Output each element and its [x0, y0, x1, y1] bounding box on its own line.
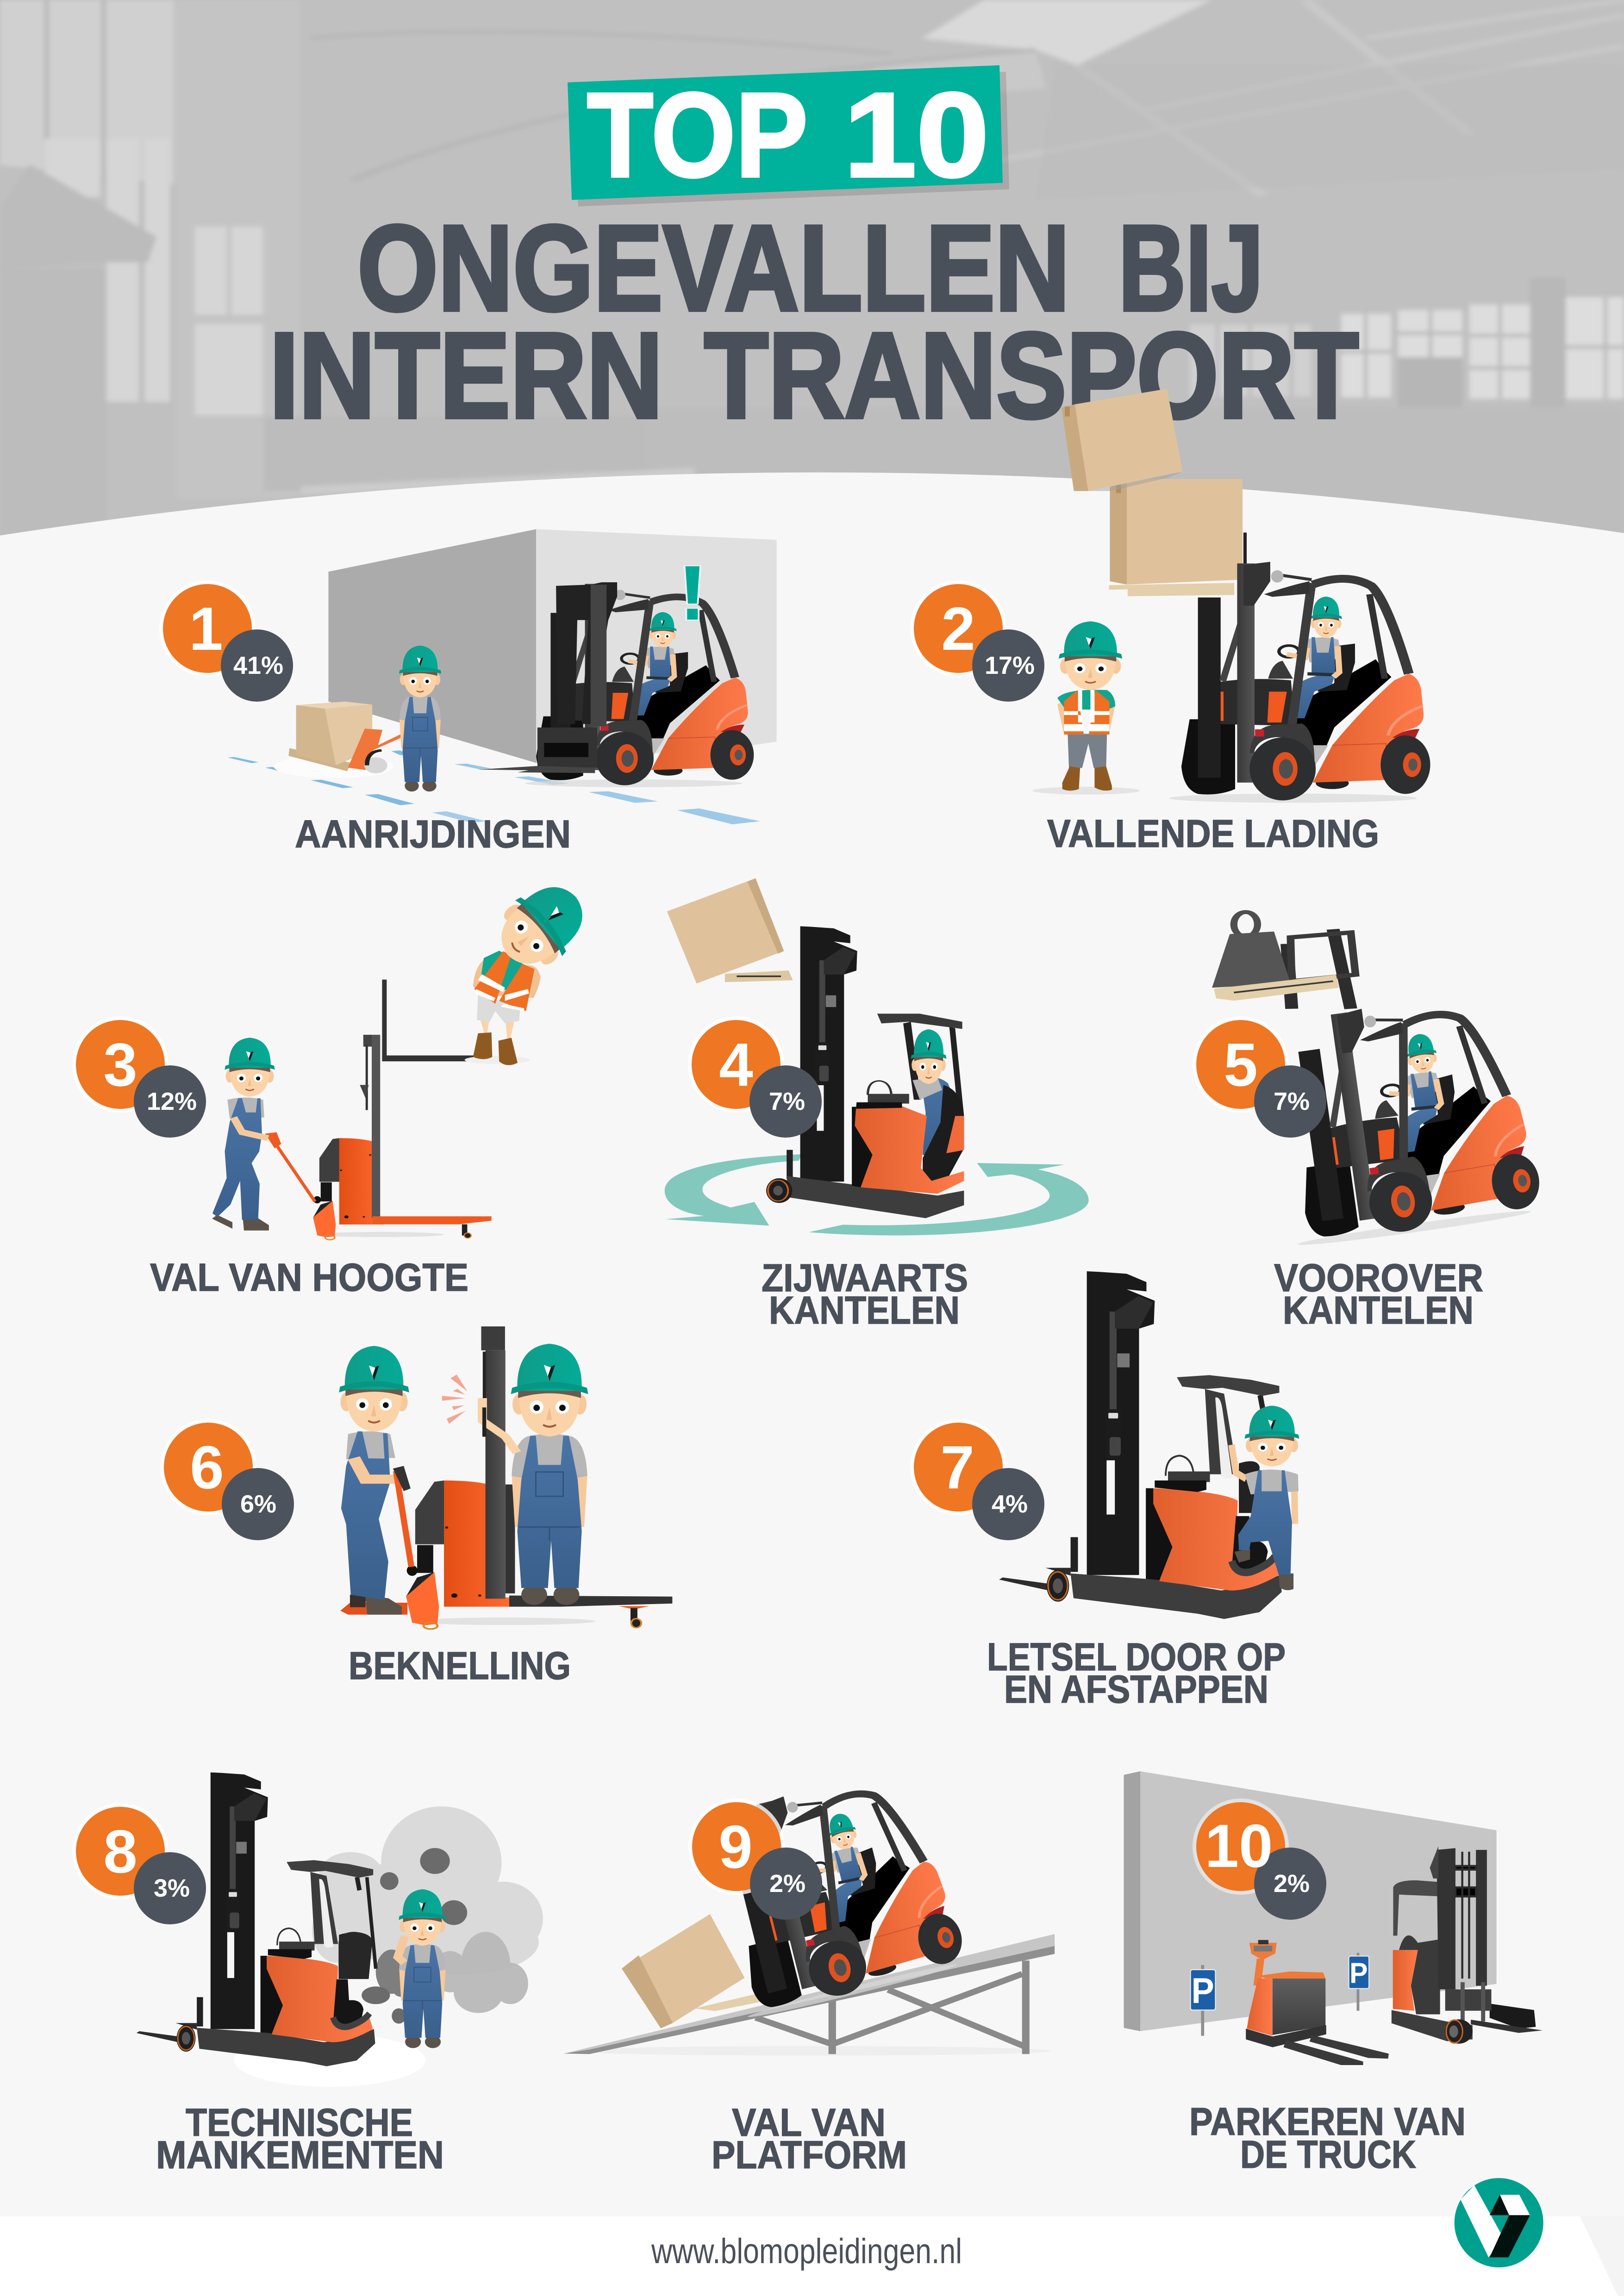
rotation arrows: [665, 1154, 1089, 1235]
worker walking: [212, 1097, 269, 1231]
forklift: [478, 582, 754, 787]
reach truck rear view: [1392, 1846, 1543, 2044]
badge 8: 3%: [154, 1874, 190, 1902]
badge 3: [72, 1016, 206, 1138]
badge 10: [1193, 1798, 1326, 1920]
tilted box and pallet: [667, 878, 793, 983]
worker left: [341, 1431, 412, 1615]
badge 4: [688, 1016, 822, 1138]
badge 5: [1193, 1016, 1326, 1138]
exclamation mark: [685, 566, 700, 620]
label: TECHNISCHE: [186, 2101, 413, 2144]
wall block: [328, 529, 777, 763]
logo: [1455, 2178, 1543, 2267]
smoke cloud: [234, 1806, 543, 2087]
worker stepping: [1231, 1445, 1299, 1590]
box and pallet: [622, 1914, 800, 2028]
badge 1: [159, 580, 293, 702]
reach truck: [999, 1271, 1282, 1619]
badge 9: 9: [718, 1813, 753, 1881]
label: KANTELEN: [1283, 1288, 1474, 1332]
panel 3: val van hoogte: [72, 869, 600, 1299]
floor dashed lines: [227, 750, 760, 824]
badge 8: [72, 1803, 206, 1924]
badge 10: 2%: [1274, 1870, 1310, 1898]
badge 7: 7: [940, 1433, 974, 1501]
ramp: [564, 1934, 1055, 2056]
label: VOOROVER: [1274, 1256, 1483, 1300]
parking signs: P: [1349, 1957, 1368, 1989]
badge 1: 41%: [233, 652, 283, 679]
stacker truck: [340, 1326, 672, 1629]
title: ONGEVALLEN: [357, 200, 1070, 336]
panel 9: val van platform: [564, 1763, 1055, 2177]
forklift: [1267, 988, 1544, 1249]
badge 6: [160, 1419, 294, 1540]
panel 5: voorover kantelen: [1193, 912, 1544, 1332]
label: VALLENDE LADING: [1047, 812, 1379, 855]
forklift on ramp: [698, 1763, 969, 2021]
label: AANRIJDINGEN: [295, 812, 571, 856]
panel 10: parkeren van de truck: [1124, 1771, 1543, 2176]
title: [269, 200, 1359, 443]
panel 7: letsel door op en afstappen: [910, 1271, 1299, 1711]
title band: top 10: TOP: [587, 68, 808, 202]
parking signs: P: [1192, 1971, 1214, 2011]
label: MANKEMENTEN: [156, 2133, 444, 2177]
badge 6: 6%: [240, 1490, 276, 1518]
badge 6: 6: [190, 1433, 224, 1501]
title band: top 10: [568, 65, 1009, 206]
label: PARKEREN VAN: [1189, 2100, 1466, 2143]
white curved main panel: [0, 473, 1624, 2296]
label: ZIJWAARTS: [762, 1256, 968, 1300]
wall: [1124, 1771, 1497, 2031]
box on pallet jack: [274, 702, 405, 778]
panel 8: technische mankementen: [72, 1773, 543, 2177]
worker with vest: [1032, 690, 1140, 795]
label: DE TRUCK: [1240, 2133, 1416, 2176]
badge 4: 7%: [769, 1088, 805, 1115]
website: www.blomopleidingen.nl: [651, 2232, 962, 2271]
title: TRANSPORT: [704, 307, 1359, 443]
label: BEKNELLING: [349, 1644, 571, 1687]
label: VAL VAN: [732, 2101, 886, 2144]
weight on pallet and raised mast: [1212, 912, 1355, 1009]
badge 1: 1: [189, 595, 223, 663]
reach truck: [137, 1773, 376, 2066]
badge 3: 3: [103, 1031, 137, 1099]
panel 6: beknelling: [160, 1326, 672, 1687]
badge 9: 2%: [769, 1870, 806, 1898]
reach truck with driver: [766, 926, 964, 1218]
panel 1: aanrijdingen: [159, 529, 777, 856]
parking signs: [1191, 1953, 1369, 2036]
pallet truck: [1246, 1940, 1389, 2065]
label: EN AFSTAPPEN: [1004, 1668, 1268, 1711]
stacker truck: [265, 980, 492, 1240]
badge 2: 17%: [985, 652, 1035, 679]
panel 4: zijwaarts kantelen: [665, 878, 1089, 1332]
label: KANTELEN: [769, 1288, 960, 1332]
label: LETSEL DOOR OP: [987, 1635, 1286, 1679]
falling boxes and pallet: [1062, 389, 1247, 596]
falling worker: [465, 869, 600, 1065]
badge 5: 7%: [1274, 1088, 1310, 1115]
badge 7: 4%: [992, 1490, 1028, 1518]
footer strip: [0, 2216, 1624, 2296]
badge 4: 4: [719, 1031, 753, 1099]
worker right: [482, 1344, 588, 1605]
badge 10: 10: [1205, 1812, 1273, 1880]
badge 5: 5: [1224, 1031, 1258, 1099]
worker: [398, 1889, 446, 2048]
badge 3: 12%: [147, 1088, 197, 1115]
impact lines: [442, 1375, 468, 1424]
warehouse photo background: [0, 0, 1624, 602]
label: PLATFORM: [712, 2133, 907, 2177]
badge 7: [910, 1419, 1044, 1540]
title band: top 10: 10: [844, 68, 989, 202]
title: INTERN: [269, 307, 663, 443]
title: BIJ: [1118, 200, 1263, 336]
panel 2: vallende lading: [910, 389, 1430, 855]
badge 8: 8: [103, 1817, 137, 1885]
forklift: [1169, 562, 1430, 803]
badge 2: 2: [941, 595, 975, 663]
worker: [399, 646, 441, 791]
badge 9: [688, 1798, 822, 1920]
badge 2: [910, 580, 1044, 702]
label: VAL VAN HOOGTE: [150, 1256, 468, 1299]
